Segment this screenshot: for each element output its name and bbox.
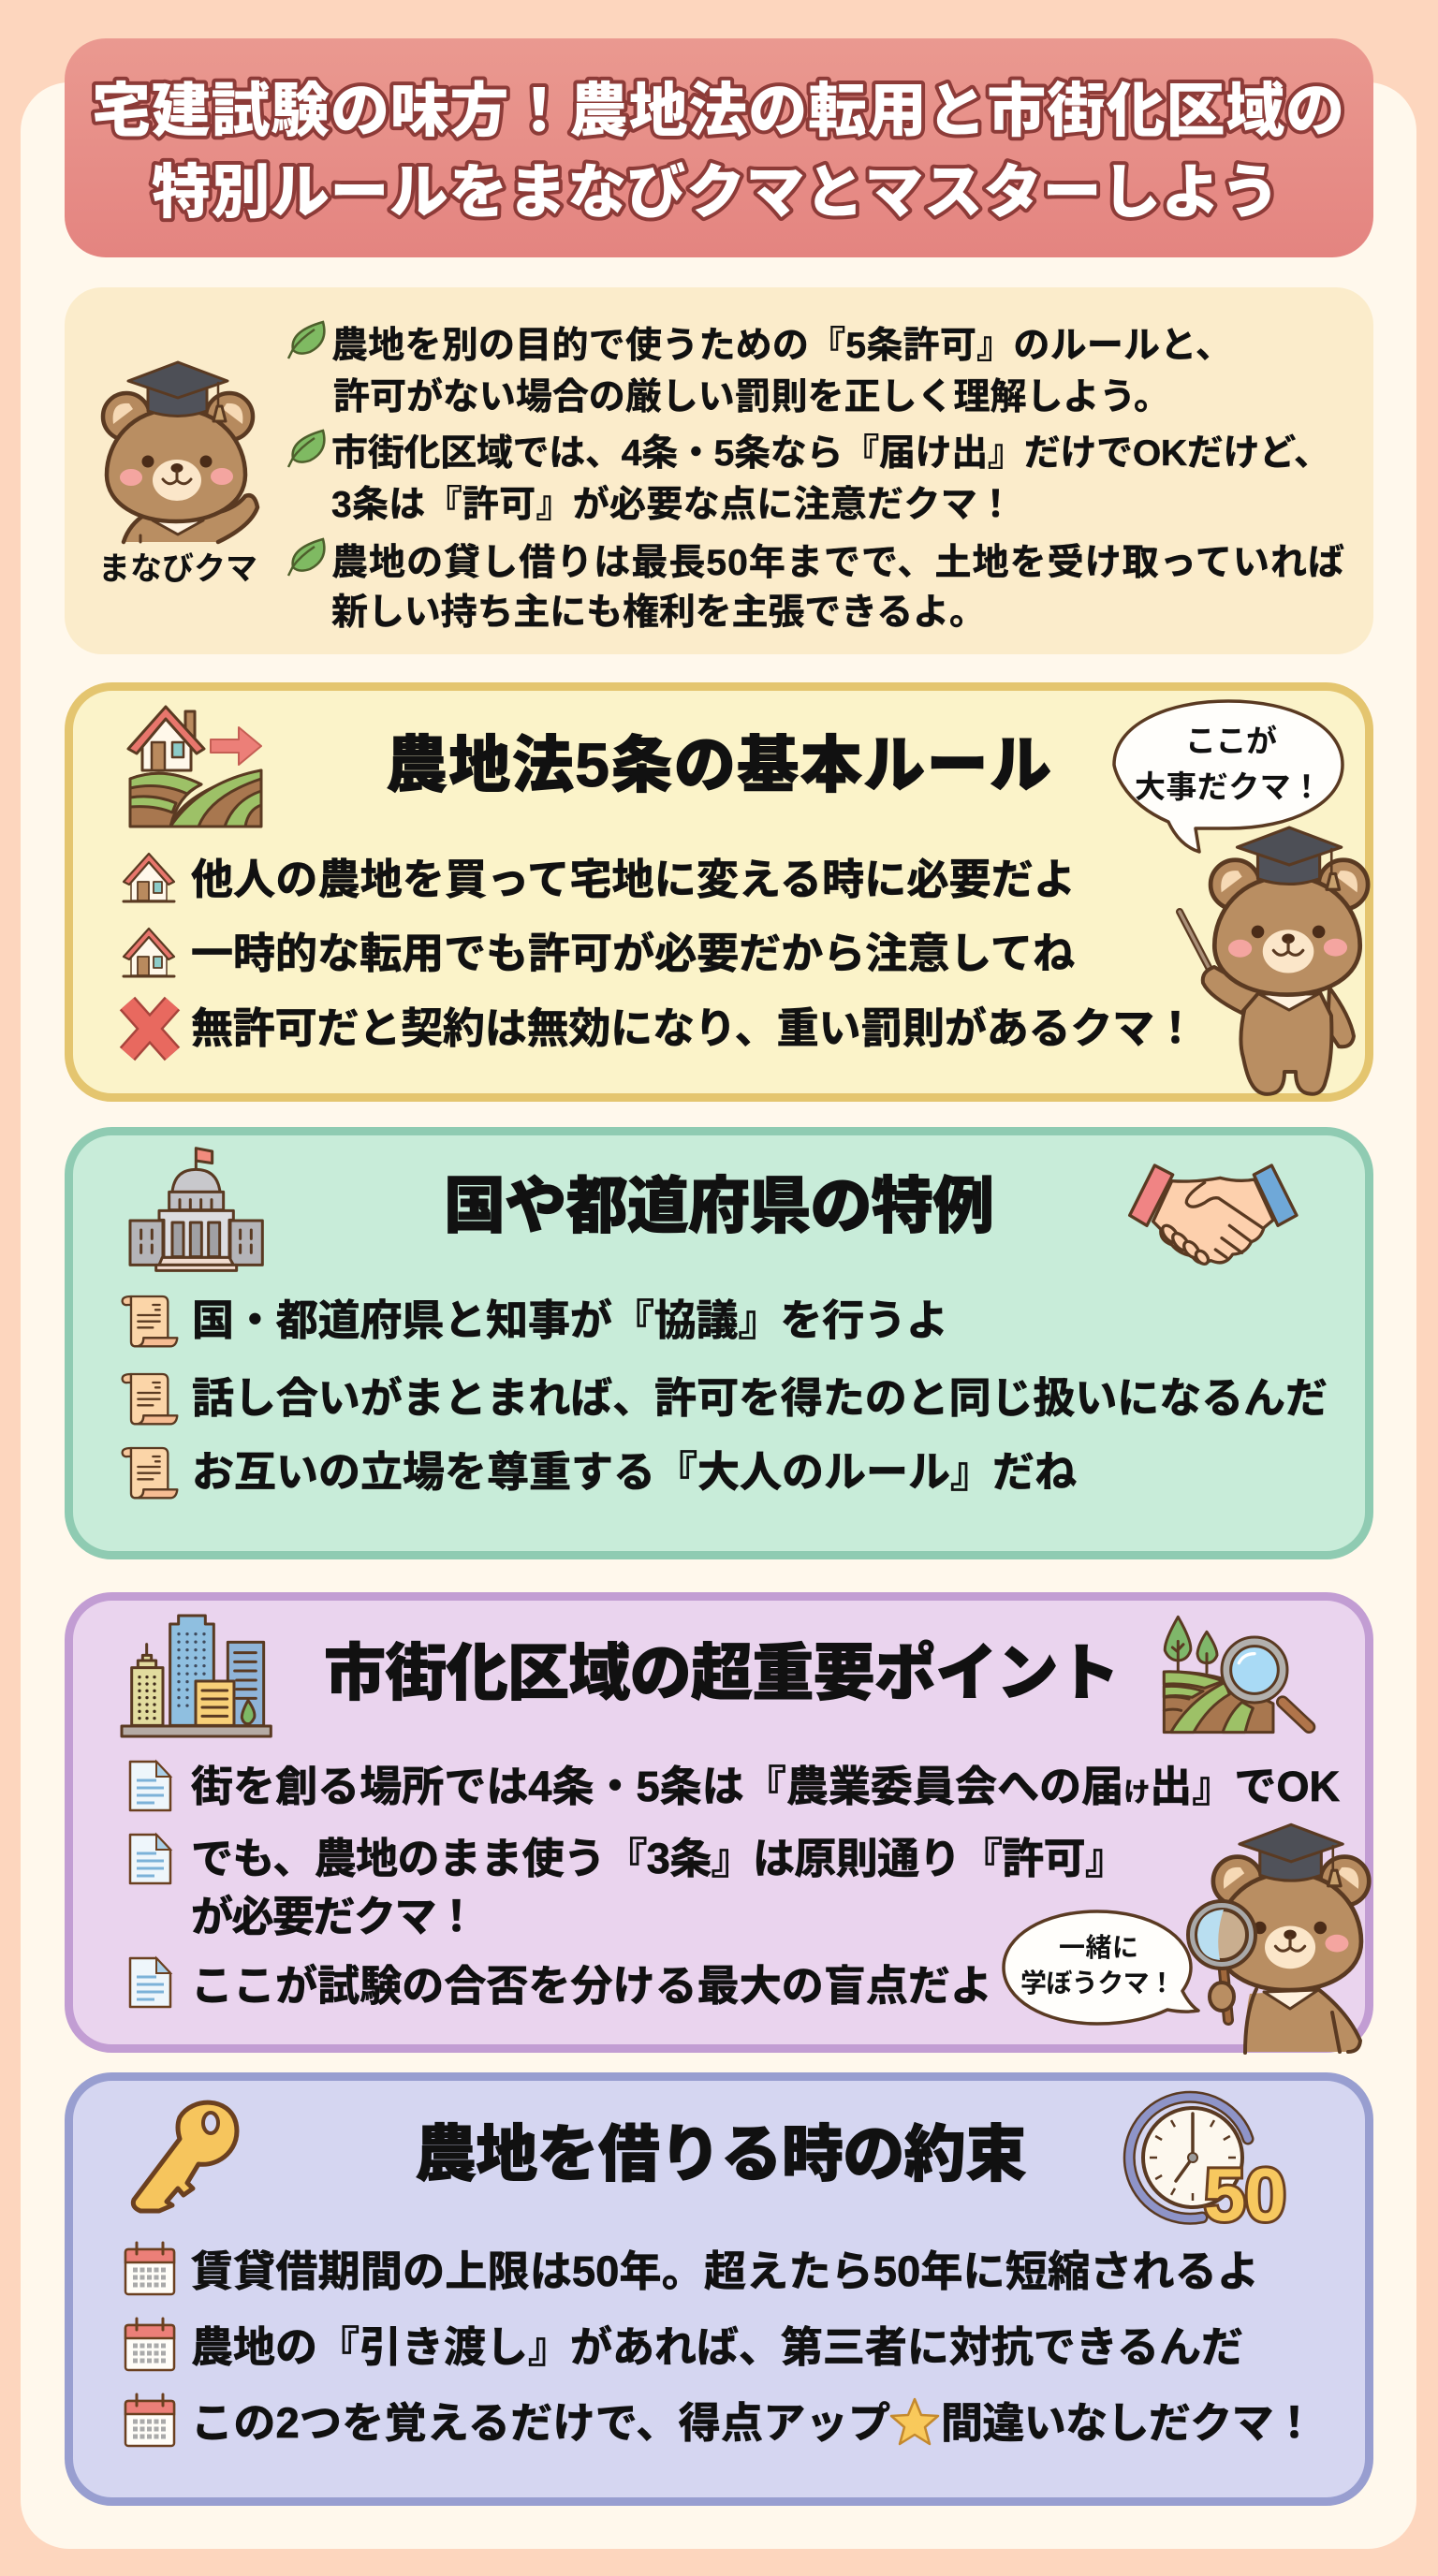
- bullet: 5条許可: 許可がない場合の厳しい罰則を正しく理解しよう。: [333, 377, 1170, 417]
- item: 話し合い: 話し合いがまとまれば、許可を得たのと同じ扱いになるんだ: [192, 1374, 1328, 1422]
- speech bubble: ここが: [1185, 724, 1277, 758]
- heading: 国や都道府県の特例: [444, 1171, 994, 1240]
- speech bubble: 大事だクマ！: [1135, 769, 1322, 804]
- bullet: 市街化区域: [288, 431, 1330, 525]
- icon: clock with 50: 50: [1204, 2153, 1286, 2236]
- item: 協議: 国・都道府県と知事が『協議』を行うよ: [192, 1296, 948, 1344]
- heading: 市街化区域の超重要ポイント: [324, 1638, 1120, 1707]
- icon: city buildings: [122, 1616, 271, 1736]
- item: 3条は許可: でも、農地のまま使う『3条』は原則通り『許可』: [191, 1835, 1127, 1882]
- speech bubble: 学ぼうクマ！: [1020, 1969, 1175, 1998]
- bullet: 貸し借り: [288, 539, 1344, 633]
- panel: 農地を借りる時の約束: [69, 2076, 1369, 2501]
- bullet: 5条許可: [288, 322, 1232, 417]
- title banner: [65, 38, 1373, 257]
- icon: clock with 50: [1129, 2097, 1286, 2236]
- speech bubble: [1004, 1911, 1198, 2024]
- character name: まなびクマ: [98, 551, 257, 587]
- icon: government building: [130, 1149, 262, 1270]
- item: 3条は許可: [130, 1835, 1127, 1940]
- panel: 農地法5条の基本ルール: [69, 687, 1369, 1097]
- title banner: 特別ルールをまなびクマとマスターしよう: [152, 160, 1280, 226]
- title banner: 宅建試験の味方！農地法の転用と市街化区域の: [92, 79, 1344, 144]
- item: 一時的な転用: 一時的な転用でも許可が必要だから注意してね: [191, 929, 1075, 977]
- panel: 国や都道府県の特例: [69, 1131, 1369, 1556]
- icon: handshake: [1130, 1165, 1297, 1266]
- bullet: 市街化区域: 市街化区域では、4条・5条なら『届け出』だけでOKだけど、: [331, 433, 1330, 474]
- item: 届け出: 街を創る場所では4条・5条は『農業委員会への届け出』でOK: [191, 1763, 1341, 1810]
- character: bear with magnifier: [1188, 1824, 1369, 2053]
- heading: 農地法5条の基本ルール: [386, 730, 1051, 799]
- item: 得点アップ: この2つを覚えるだけで、得点アップ: [191, 2399, 890, 2447]
- item: 上限50年: 賃貸借期間の上限は50年。超えたら50年に短縮されるよ: [191, 2247, 1259, 2295]
- icon: key: [133, 2102, 237, 2211]
- item: 引き渡し: 農地の『引き渡し』があれば、第三者に対抗できるんだ: [191, 2323, 1243, 2371]
- bullet: 貸し借り: 農地の貸し借りは最長50年までで、土地を受け取っていれば: [331, 543, 1344, 583]
- heading: 農地を借りる時の約束: [415, 2119, 1027, 2188]
- item: 得点アップ: 間違いなしだクマ！: [941, 2399, 1315, 2447]
- bullet: 市街化区域: 3条は『許可』が必要な点に注意だクマ！: [331, 485, 1014, 525]
- item: 大人のルール: お互いの立場を尊重する『大人のルール』だね: [192, 1448, 1077, 1496]
- bullet: 5条許可: 農地を別の目的で使うための『5条許可』のルールと、: [331, 326, 1232, 366]
- item: 盲点: ここが試験の合否を分ける最大の盲点だよ: [191, 1962, 992, 2010]
- character: teacher bear with pointer: [1180, 827, 1368, 1094]
- item: 他人の農地: 他人の農地を買って宅地に変える時に必要だよ: [191, 856, 1076, 903]
- panel: 市街化区域の超重要ポイント: [69, 1597, 1369, 2053]
- character: manabi bear waving: [103, 362, 257, 542]
- panel: summary: [65, 287, 1373, 654]
- item: 無許可: 無許可だと契約は無効になり、重い罰則があるクマ！: [191, 1004, 1196, 1052]
- bullet: 貸し借り: 新しい持ち主にも権利を主張できるよ。: [331, 593, 986, 633]
- speech bubble: 一緒に: [1059, 1933, 1138, 1962]
- speech bubble: [1114, 701, 1343, 852]
- item: 得点アップ: [125, 2394, 1315, 2447]
- icon: farmland with magnifier: [1164, 1617, 1309, 1733]
- item: 3条は許可: が必要だクマ！: [191, 1893, 477, 1940]
- icon: house to field: [128, 707, 261, 827]
